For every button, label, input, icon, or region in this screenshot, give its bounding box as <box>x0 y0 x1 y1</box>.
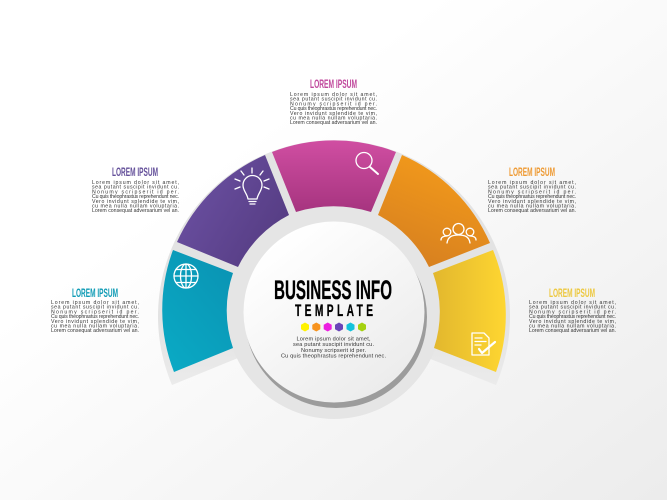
block: magenta: Nonumy scripserit id per. <box>290 101 377 107</box>
center description: Lorem ipsum dolor sit amet, <box>296 336 371 342</box>
block: purple: sea putant suscipit invidunt cu. <box>92 185 179 191</box>
gray fan backing <box>158 140 510 419</box>
block: orange <box>488 167 576 214</box>
center circle shadow <box>245 226 427 408</box>
block: yellow: Lorem ipsum dolor sit amet, <box>529 300 616 306</box>
subtitle: TEMPLATE <box>295 302 373 320</box>
block: orange: Nonumy scripserit id per. <box>488 189 576 195</box>
center description: sea putant suscipit invidunt cu. <box>293 342 374 348</box>
icon: light bulb <box>235 168 269 204</box>
block: teal: Lorem consequat adversarium vel an. <box>51 328 139 334</box>
center description: Nonumy scripserit id per. <box>301 348 366 354</box>
block: magenta: Lorem consequat adversarium vel an. <box>290 120 377 126</box>
block: orange: Cu quis theophrastus reprehendunt nec. <box>488 194 576 200</box>
block: purple: Lorem consequat adversarium vel an. <box>92 208 179 214</box>
block: magenta: sea putant suscipit invidunt cu. <box>290 97 377 103</box>
block: yellow: Lorem consequat adversarium vel an. <box>529 328 616 334</box>
block: magenta: Lorem ipsum dolor sit amet, <box>290 92 377 98</box>
block: magenta: cu mea nulla nullam voluptaria. <box>290 116 377 122</box>
block: teal: LOREM IPSUM <box>72 288 118 300</box>
center description <box>281 336 386 360</box>
block: teal <box>51 288 139 334</box>
block: purple: LOREM IPSUM <box>112 167 158 179</box>
block: teal: Nonumy scripserit id per. <box>51 309 139 315</box>
block: purple: Lorem ipsum dolor sit amet, <box>92 180 179 186</box>
block: yellow <box>529 288 616 334</box>
title: BUSINESS INFO <box>274 275 392 305</box>
icon: document <box>472 333 495 355</box>
block: orange: sea putant suscipit invidunt cu. <box>488 185 576 191</box>
block: teal: cu mea nulla nullam voluptaria. <box>51 324 139 330</box>
block: magenta <box>290 79 377 126</box>
icon: globe <box>174 264 198 288</box>
block: purple: Cu quis theophrastus reprehendunt nec. <box>92 194 179 200</box>
block: magenta: Cu quis theophrastus reprehendunt nec. <box>290 106 377 112</box>
block: magenta: Vero invidunt splendide te vim, <box>290 111 377 117</box>
block: yellow: LOREM IPSUM <box>549 288 595 300</box>
block: teal: Lorem ipsum dolor sit amet, <box>51 300 139 306</box>
block: purple <box>92 167 179 214</box>
center circle <box>244 222 424 402</box>
segment: magenta <box>272 140 396 212</box>
block: purple: Vero invidunt splendide te vim, <box>92 199 179 205</box>
hexagon dots <box>301 322 366 332</box>
icon: people <box>441 224 476 243</box>
block: teal: Vero invidunt splendide te vim, <box>51 319 139 325</box>
block: yellow: Nonumy scripserit id per. <box>529 309 616 315</box>
block: orange: cu mea nulla nullam voluptaria. <box>488 204 576 210</box>
segment: purple <box>177 155 289 267</box>
block: purple: Nonumy scripserit id per. <box>92 189 179 195</box>
segment: yellow <box>433 250 506 372</box>
block: magenta: LOREM IPSUM <box>310 79 357 91</box>
block: yellow: Cu quis theophrastus reprehendunt nec. <box>529 314 616 320</box>
block: teal: sea putant suscipit invidunt cu. <box>51 305 139 311</box>
block: orange: Lorem ipsum dolor sit amet, <box>488 180 576 186</box>
center description: Cu quis theophrastus reprehendunt nec. <box>281 354 386 360</box>
block: teal: Cu quis theophrastus reprehendunt nec. <box>51 314 139 320</box>
block: purple: cu mea nulla nullam voluptaria. <box>92 204 179 210</box>
block: yellow: cu mea nulla nullam voluptaria. <box>529 324 616 330</box>
block: orange: Lorem consequat adversarium vel an. <box>488 208 576 214</box>
icon: magnifier <box>356 152 378 174</box>
segment: teal <box>162 250 233 372</box>
segment: orange <box>378 155 490 267</box>
block: yellow: Vero invidunt splendide te vim, <box>529 319 616 325</box>
block: orange: Vero invidunt splendide te vim, <box>488 199 576 205</box>
block: orange: LOREM IPSUM <box>509 167 555 179</box>
block: yellow: sea putant suscipit invidunt cu. <box>529 305 616 311</box>
